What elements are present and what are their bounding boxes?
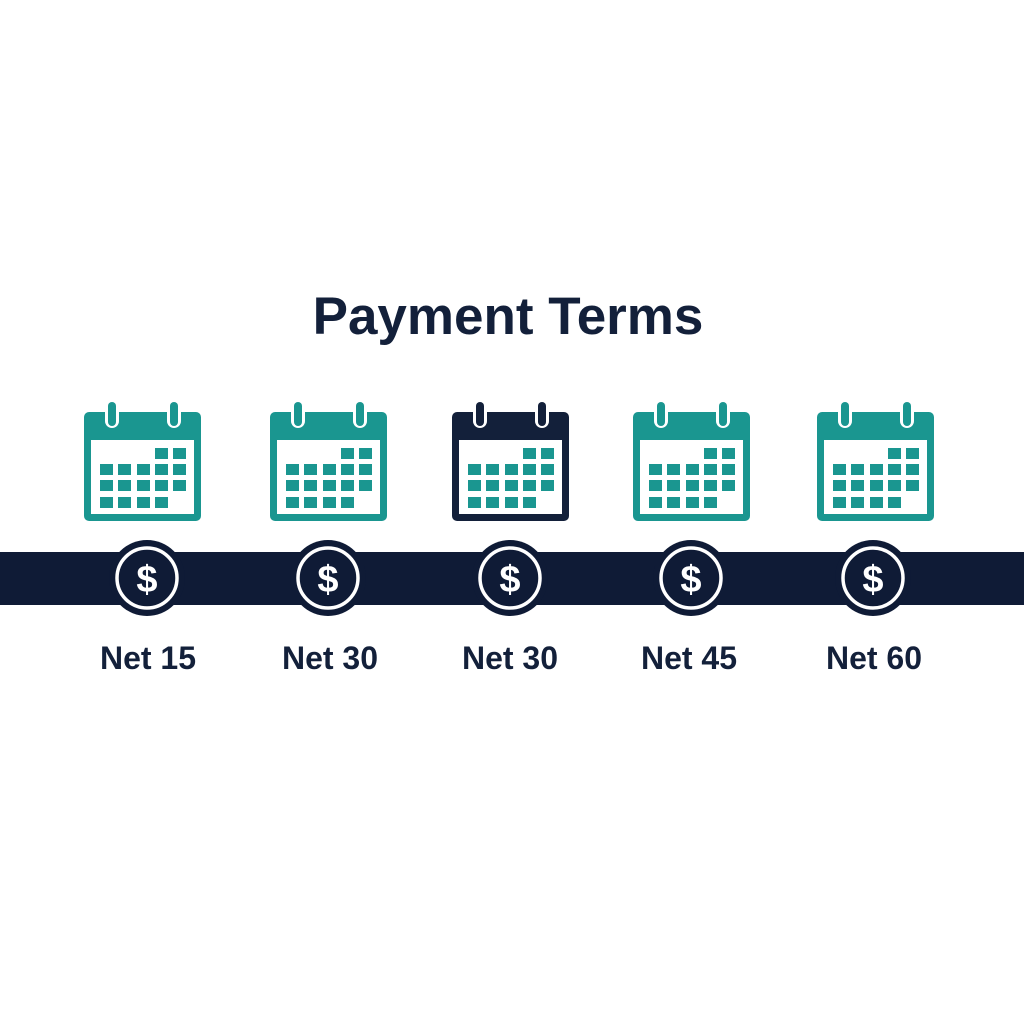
labels	[100, 640, 922, 676]
coin 1	[109, 540, 185, 616]
coin 5	[835, 540, 911, 616]
coin 1: $	[136, 559, 158, 601]
coin 3: $	[499, 559, 521, 601]
calendar 1	[84, 399, 201, 521]
calendar 2	[270, 399, 387, 521]
coin 2: $	[317, 559, 339, 601]
coin 5: $	[862, 559, 884, 601]
coin 2	[290, 540, 366, 616]
coin 3	[472, 540, 548, 616]
coin 4: $	[680, 559, 702, 601]
labels: Net 45	[641, 640, 737, 676]
timeline band	[0, 552, 1024, 605]
labels: Net 30	[282, 640, 378, 676]
calendar 3 (highlighted)	[452, 399, 569, 521]
calendar 5	[817, 399, 934, 521]
coin 4	[653, 540, 729, 616]
title: Payment Terms	[313, 287, 703, 346]
labels: Net 15	[100, 640, 196, 676]
labels: Net 60	[826, 640, 922, 676]
labels: Net 30	[462, 640, 558, 676]
calendar 4	[633, 399, 750, 521]
